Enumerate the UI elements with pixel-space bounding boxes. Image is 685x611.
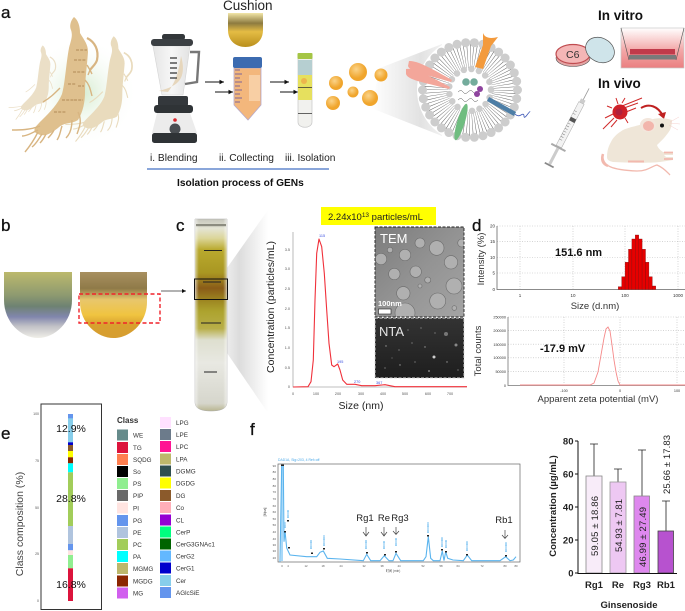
chart: HPLC chromatogram: 80 xyxy=(514,564,518,568)
chart: ginsenoside concentration bars: Rb1 xyxy=(657,580,676,591)
percentages xyxy=(56,423,86,591)
callout: red dashed selection xyxy=(79,294,160,323)
panel e: lipid class composition xyxy=(1,404,215,610)
heading: In vitro: In vitro xyxy=(598,8,643,23)
legend xyxy=(117,416,215,598)
callout: particle count: 13 xyxy=(362,212,369,219)
chart: zeta potential: 250000 xyxy=(493,316,506,320)
icon: mouse xyxy=(602,117,680,175)
arrow: blending to collecting xyxy=(205,82,233,92)
chart: HPLC chromatogram: 38 xyxy=(380,564,384,568)
chart: HPLC chromatogram: 20 xyxy=(273,556,276,560)
legend: TG xyxy=(133,445,142,452)
legend: LPE xyxy=(176,432,188,439)
chart: HPLC chromatogram: 4 xyxy=(287,564,289,568)
chart: HPLC chromatogram: 12 xyxy=(304,564,308,568)
arrow: collecting to isolation xyxy=(270,82,298,92)
panel a: isolation workflow xyxy=(1,0,684,189)
chart: NTA size distribution: 0 xyxy=(292,392,294,396)
chart: ginsenoside concentration bars: 46.99 ± 27.49 xyxy=(638,507,649,567)
photo: TEM xyxy=(375,227,466,323)
chart: HPLC chromatogram: 50 xyxy=(273,523,276,527)
chart: NTA size distribution: 3.5 xyxy=(285,248,290,252)
chart: HPLC chromatogram: 80 xyxy=(273,484,276,488)
chart: HPLC chromatogram: 58 xyxy=(439,564,443,568)
chart: NTA size distribution: 195 xyxy=(337,360,343,364)
chart: HPLC chromatogram: 80 xyxy=(273,470,276,474)
chart: DLS size histogram: 15 xyxy=(490,239,495,244)
panel d: DLS and zeta xyxy=(472,216,685,405)
legend: PIP xyxy=(133,493,143,500)
photo: tube after xyxy=(80,272,147,338)
icon: conical collection tube xyxy=(233,57,262,120)
annotations xyxy=(356,513,513,526)
chart: zeta potential: Apparent zeta potential (mV) xyxy=(538,394,658,405)
chart: DLS size histogram: Size (d.nm) xyxy=(571,301,619,312)
icon: cushion tube xyxy=(228,13,263,47)
axis title: Class composition (%) xyxy=(14,472,26,576)
chart: HPLC chromatogram: 70 xyxy=(273,490,276,494)
chart: ginsenoside concentration bars xyxy=(548,435,677,611)
chart: HPLC chromatogram: 80 xyxy=(503,564,507,568)
legend: CerP xyxy=(176,530,190,536)
chart: ginsenoside concentration bars: Ginsenoside xyxy=(600,600,658,611)
legend: PC xyxy=(133,542,142,549)
cargo xyxy=(462,78,483,97)
chart: NTA size distribution: 115 xyxy=(319,234,325,238)
legend: DGDG xyxy=(176,480,195,488)
callout: particle count xyxy=(321,207,436,225)
legend: CL xyxy=(176,518,185,524)
label b: b xyxy=(1,216,10,235)
chart: DLS size histogram: 1000 xyxy=(673,293,684,298)
chart: NTA size distribution: 367 xyxy=(376,381,382,385)
chart: zeta potential: -17.9 mV xyxy=(540,343,586,355)
axis title: Size (nm) xyxy=(339,400,383,412)
chart: ginsenoside concentration bars: 80 xyxy=(563,436,574,448)
chart: ginsenoside concentration bars: 0 xyxy=(568,568,574,580)
chart: zeta potential: -100 xyxy=(560,389,568,393)
chart: NTA size distribution: 1.5 xyxy=(285,326,290,330)
selection box xyxy=(194,279,228,300)
step labels: ii. Collecting xyxy=(219,153,274,164)
chart: NTA size distribution: 300 xyxy=(358,392,364,396)
legend: PE xyxy=(133,530,141,537)
chart: HPLC chromatogram: 72 xyxy=(480,564,484,568)
legend: Co xyxy=(176,505,185,512)
annotations: Rb1 xyxy=(495,515,513,526)
chart: HPLC chromatogram: DAD1A, Sig=203, 4 Ref=off xyxy=(278,458,319,462)
chart: HPLC chromatogram: 60 xyxy=(273,504,276,508)
legend: MGMG xyxy=(133,566,153,573)
chart: NTA size distribution: 3.0 xyxy=(285,267,290,271)
chart frame xyxy=(41,404,102,610)
chart: DLS size histogram: 0 xyxy=(492,287,495,292)
chart: NTA size distribution: 100 xyxy=(313,392,319,396)
chart: zeta potential: 100 xyxy=(674,389,680,393)
icon: nanoparticle spheres xyxy=(326,63,388,110)
stacked bar xyxy=(68,414,73,601)
icon: ultracentrifuge tube xyxy=(298,53,312,127)
chart: zeta potential: 50000 xyxy=(495,370,506,374)
legend: LPA xyxy=(176,456,188,464)
chart: ginsenoside concentration bars: Rg3 xyxy=(633,580,651,591)
zoom cone xyxy=(227,210,268,413)
photo: NTA: NTA xyxy=(379,324,404,339)
annotations: Rg1 xyxy=(356,513,374,524)
step labels xyxy=(150,153,335,164)
chart: HPLC chromatogram: 70 xyxy=(273,497,276,501)
photo: tube before xyxy=(4,272,72,338)
chart: NTA size distribution: 1.0 xyxy=(285,346,290,350)
chart: HPLC chromatogram xyxy=(263,458,520,573)
chart: HPLC chromatogram: [Mpa] xyxy=(263,508,267,516)
protein: orange receptor xyxy=(475,33,498,69)
chart: ginsenoside concentration bars: Concentration (µg/mL) xyxy=(548,455,559,557)
chart: zeta potential: 0 xyxy=(619,389,621,393)
chart: HPLC chromatogram: 50 xyxy=(273,517,276,521)
callout: particle count: particles/mL xyxy=(369,212,423,223)
chart: NTA size distribution: 400 xyxy=(380,392,386,396)
chart: DLS size histogram: 100 xyxy=(621,293,629,298)
chart: HPLC chromatogram: 30 xyxy=(273,543,276,547)
icon: blender xyxy=(151,34,199,143)
label e: e xyxy=(1,424,10,443)
axis ticks: 0 xyxy=(37,599,39,603)
chart: ginsenoside concentration bars: 60 xyxy=(563,470,574,480)
chart: zeta potential: 200000 xyxy=(493,329,506,333)
chart: ginsenoside concentration bars: 54.93 ± 7.81 xyxy=(614,499,625,552)
legend: LPG xyxy=(176,420,189,427)
icon: ginseng roots xyxy=(9,17,138,152)
icon: zoom cone xyxy=(371,44,442,136)
chart: ginsenoside concentration bars: Rg1 xyxy=(585,580,604,591)
icon: transwell xyxy=(621,28,684,68)
chart: zeta potential: 0 xyxy=(504,384,506,388)
chart: ginsenoside concentration bars: Re xyxy=(612,580,624,591)
icon: C6 petri dish: C6 xyxy=(566,49,580,61)
callout: particle count: 2.24x10 xyxy=(328,212,362,223)
percentages: 28.8% xyxy=(56,493,86,505)
legend: WE xyxy=(133,432,143,440)
chart: DLS size histogram: Intensity (%) xyxy=(476,233,487,285)
panel b: centrifuged tubes xyxy=(1,216,186,338)
legend: MGDG xyxy=(133,578,153,586)
chart: NTA size distribution: 200 xyxy=(335,392,341,396)
photo: TEM: 100nm xyxy=(378,299,402,308)
legend: MG xyxy=(133,590,143,598)
protein: green xyxy=(452,103,470,141)
chart: HPLC chromatogram: 30 xyxy=(273,549,276,553)
chart: NTA size distribution: 2.5 xyxy=(285,287,290,291)
step labels: i. Blending xyxy=(150,153,198,164)
label d: d xyxy=(472,216,481,235)
legend: CerG3GNAc1 xyxy=(176,542,215,548)
heading: In vivo: In vivo xyxy=(598,76,641,91)
legend: LPC xyxy=(176,444,189,451)
panel c: density gradient and NTA xyxy=(176,207,467,413)
chart: HPLC chromatogram: 40 xyxy=(273,530,276,534)
chart: HPLC chromatogram: 18 xyxy=(321,564,325,568)
chart: HPLC chromatogram: 60 xyxy=(273,510,276,514)
photo: gradient tube xyxy=(195,219,227,411)
chart: NTA size distribution: 270 xyxy=(354,380,360,384)
chart: DLS size histogram: 10 xyxy=(570,293,576,298)
chart: DLS size histogram: 1 xyxy=(519,293,522,298)
chart: HPLC chromatogram: 52 xyxy=(421,564,425,568)
label f: f xyxy=(250,420,255,439)
chart: HPLC chromatogram: 44 xyxy=(397,564,401,568)
chart: zeta potential xyxy=(473,316,685,405)
axis title: Concentration (particles/mL) xyxy=(265,241,277,373)
legend: DGMG xyxy=(176,468,196,476)
annotations: Rg3 xyxy=(391,513,409,524)
chart: HPLC chromatogram: 40 xyxy=(273,537,276,541)
icon: C6 petri dish xyxy=(556,32,619,68)
panel f: ginsenosides xyxy=(250,420,677,611)
chart: DLS size histogram xyxy=(476,224,685,312)
chart: NTA size distribution: 600 xyxy=(425,392,431,396)
axis ticks: 25 xyxy=(35,552,39,556)
chart: DLS size histogram: 5 xyxy=(492,270,495,276)
chart: ginsenoside concentration bars: 20 xyxy=(563,536,574,546)
chart: ginsenoside concentration bars: 25.66 ± 17.83 xyxy=(662,435,673,494)
legend: SQDG xyxy=(133,457,152,464)
photo: TEM: TEM xyxy=(380,231,407,246)
label a: a xyxy=(1,3,11,22)
percentages: 16.8% xyxy=(56,579,86,591)
axis ticks: 100 xyxy=(33,412,39,416)
diagram: vesicle membrane xyxy=(406,33,530,143)
chart: zeta potential: 100000 xyxy=(493,356,506,360)
legend: AGlcSiE xyxy=(176,590,199,597)
legend: Cer xyxy=(176,578,186,585)
heading: isolation process: Isolation process of GENs xyxy=(177,178,304,189)
protein: pink pair xyxy=(406,61,452,89)
chart: NTA size distribution: 700 xyxy=(447,392,453,396)
legend: PS xyxy=(133,481,141,488)
chart: HPLC chromatogram: 80 xyxy=(273,477,276,481)
axis ticks: 75 xyxy=(35,459,39,463)
annotations: Re xyxy=(378,513,390,524)
legend: So xyxy=(133,469,141,476)
photo: NTA xyxy=(375,318,464,378)
legend: PA xyxy=(133,554,142,561)
chart: HPLC chromatogram: 32 xyxy=(362,564,366,568)
arrows xyxy=(363,527,508,538)
chart: zeta potential: Total counts xyxy=(473,325,484,376)
legend: PI xyxy=(133,506,139,512)
chart: DLS size histogram: 10 xyxy=(490,255,495,260)
chart: NTA size distribution: 2.0 xyxy=(285,307,290,311)
legend: DG xyxy=(176,493,186,500)
percentages: 12.9% xyxy=(56,423,86,435)
chart: DLS size histogram: 20 xyxy=(490,224,495,228)
legend: PG xyxy=(133,518,142,525)
label c: c xyxy=(176,216,185,235)
axis ticks: 50 xyxy=(35,506,39,510)
chart: NTA size distribution: 0 xyxy=(288,385,290,389)
chart: DLS size histogram: 151.6 nm xyxy=(555,247,602,259)
arrow: b to c xyxy=(161,290,186,292)
legend: CerG1 xyxy=(176,566,195,572)
chart: NTA size distribution: 0.5 xyxy=(285,366,290,370)
chart: NTA size distribution: 500 xyxy=(402,392,408,396)
chart: zeta potential: 150000 xyxy=(493,343,506,347)
chart: HPLC chromatogram: 0 xyxy=(281,564,283,568)
protein: blue channel xyxy=(488,99,515,114)
chart: ginsenoside concentration bars: 59.05 ± 18.86 xyxy=(590,496,601,556)
axis ticks xyxy=(33,412,39,603)
chart: NTA size distribution xyxy=(265,232,467,412)
chart: HPLC chromatogram: 时间 (min) xyxy=(386,568,400,573)
chart: ginsenoside concentration bars: 40 xyxy=(563,502,574,514)
arrow: injection into mouse brain xyxy=(641,106,666,119)
chart: HPLC chromatogram: 24 xyxy=(339,564,343,568)
legend: Class xyxy=(117,416,139,425)
legend: CerG2 xyxy=(176,554,195,560)
chart: HPLC chromatogram: 90 xyxy=(273,464,276,468)
icon: tumor cell xyxy=(603,98,642,129)
chart: HPLC chromatogram: 64 xyxy=(456,564,460,568)
step labels: iii. Isolation xyxy=(285,153,335,164)
icon: syringe xyxy=(542,85,596,170)
